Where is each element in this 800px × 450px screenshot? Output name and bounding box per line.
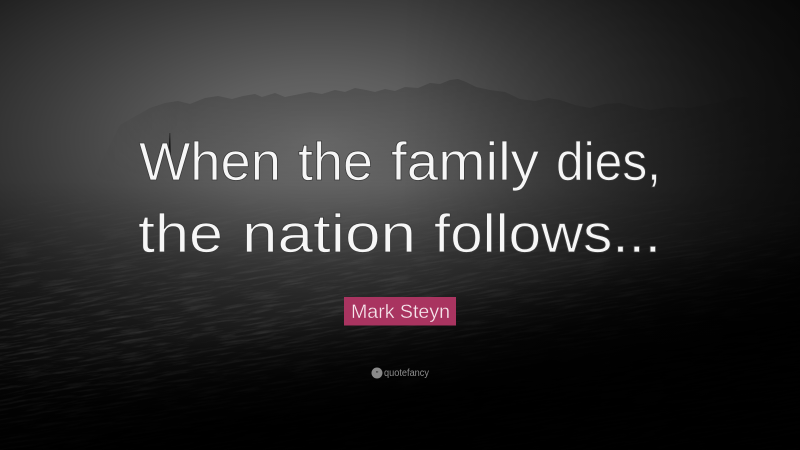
author badge: Mark Steyn: [351, 302, 450, 323]
line 1: family: [391, 132, 539, 192]
line 2: the: [138, 204, 223, 264]
line 1: When: [139, 132, 281, 192]
sailboat mark: [168, 133, 172, 160]
quotefancy logo: quotefancy: [384, 368, 429, 379]
line 1: the: [298, 132, 373, 192]
line 2: nation: [242, 204, 416, 264]
line 1: [139, 132, 661, 192]
line 2: [138, 204, 661, 264]
quote text: [138, 132, 661, 264]
water texture: [0, 248, 630, 412]
quotefancy logo: ": [376, 370, 379, 379]
mountain range silhouette: [161, 79, 544, 148]
line 2: follows...: [434, 204, 661, 264]
author badge: [344, 297, 456, 326]
line 1: dies,: [556, 132, 661, 192]
